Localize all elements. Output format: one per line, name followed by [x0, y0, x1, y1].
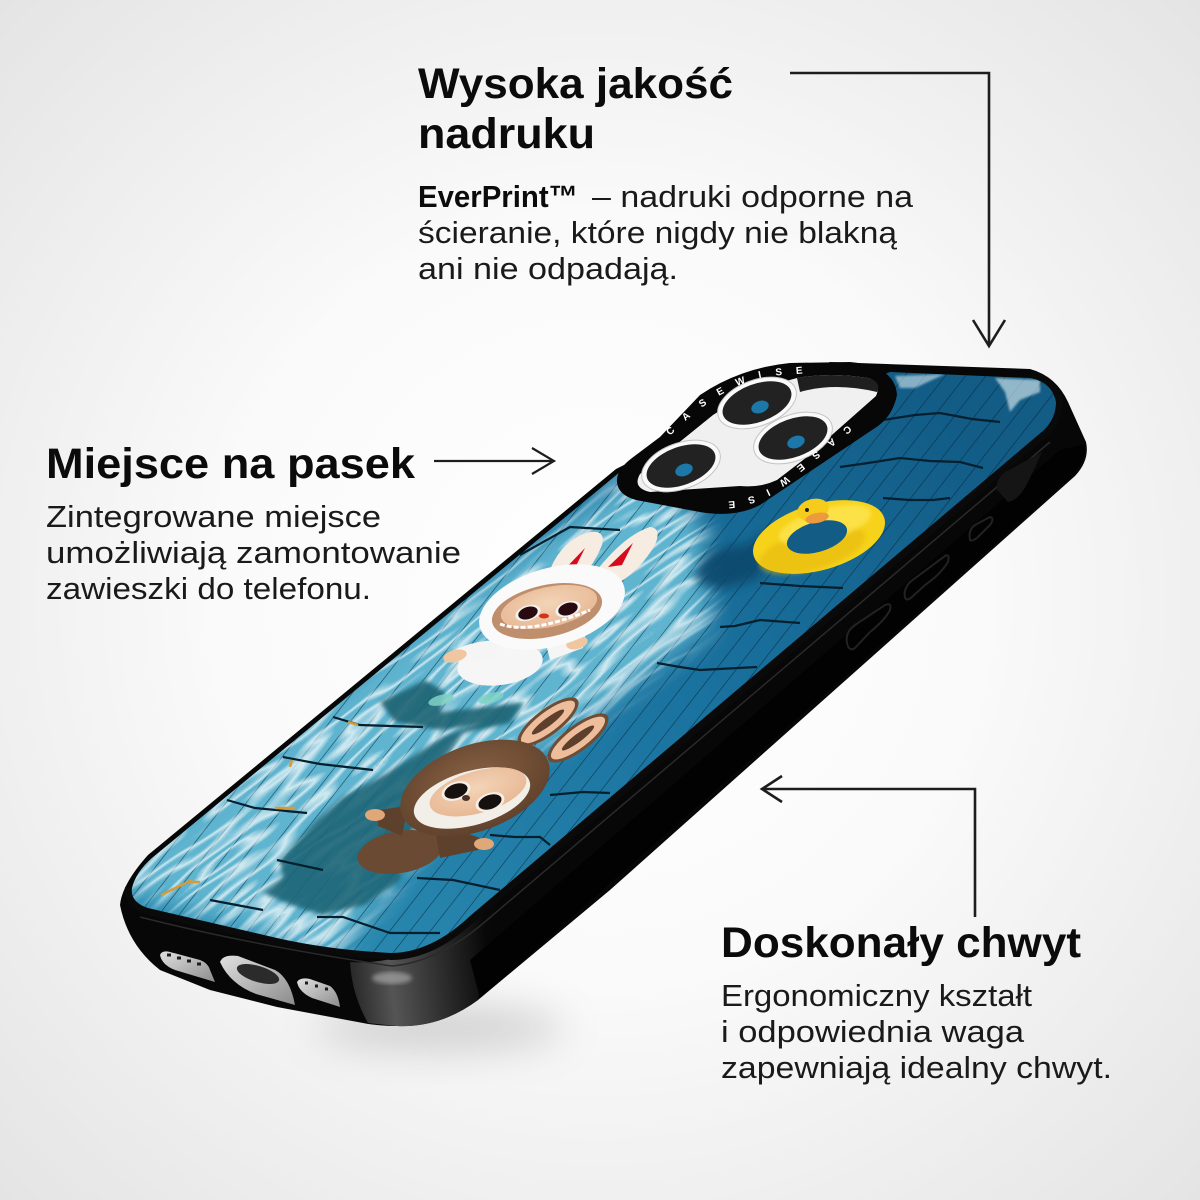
bumper lettering: CASEWISE — [728, 426, 851, 508]
teal feet under white bunny — [428, 692, 504, 706]
callout: strap slot — [46, 440, 461, 606]
description: zawieszki do telefonu. — [46, 571, 371, 606]
heading: Miejsce na pasek — [46, 440, 415, 488]
charging port — [220, 956, 295, 1005]
lit aqua water — [100, 470, 710, 960]
camera bumper — [616, 362, 897, 514]
inflatable duck ring — [745, 487, 893, 587]
phone with printed case — [120, 362, 1087, 1026]
phone drop shadow — [315, 1006, 565, 1050]
lens top — [711, 367, 803, 439]
arrow: to print surface — [790, 73, 1005, 346]
heading: Doskonały chwyt — [721, 919, 1081, 967]
description: – nadruki odporne na — [592, 179, 914, 214]
arrow: to case side — [762, 776, 975, 917]
description — [46, 499, 461, 606]
water caustics — [132, 474, 726, 950]
speaker left — [160, 951, 215, 982]
description — [721, 978, 1112, 1085]
brown bunny character — [358, 697, 608, 874]
case body — [120, 362, 1087, 1026]
heading: Wysoka jakość — [418, 60, 733, 108]
callout: print quality — [418, 60, 914, 286]
speaker right — [297, 978, 340, 1007]
heading — [418, 60, 733, 158]
bottom ports — [160, 951, 340, 1007]
description: Ergonomiczny kształt — [721, 978, 1032, 1013]
description: ścieranie, które nigdy nie blakną — [418, 215, 898, 250]
heading: nadruku — [418, 110, 595, 158]
description: Zintegrowane miejsce — [46, 499, 381, 534]
camera window — [638, 375, 878, 492]
artwork: pool water — [132, 372, 1056, 953]
arrow: to strap slot — [434, 448, 554, 474]
callout: perfect grip — [721, 919, 1112, 1085]
lens right — [747, 402, 839, 474]
bumper lettering — [666, 366, 851, 508]
white bunny character — [442, 527, 658, 691]
lens left — [635, 430, 727, 502]
description: ani nie odpadają. — [418, 251, 678, 286]
description: EverPrint™ — [418, 179, 578, 214]
description: i odpowiednia waga — [721, 1014, 1025, 1049]
bumper lettering: CASEWISE — [666, 366, 802, 434]
tile cracks — [210, 413, 1000, 933]
description: umożliwiają zamontowanie — [46, 535, 461, 570]
tile grid — [132, 373, 1054, 953]
description: zapewniają idealny chwyt. — [721, 1050, 1112, 1085]
water shadows — [263, 530, 770, 915]
gold crack glints — [161, 722, 358, 895]
side buttons — [847, 452, 1042, 649]
top corner sparkle — [895, 374, 1040, 412]
description — [418, 179, 914, 286]
